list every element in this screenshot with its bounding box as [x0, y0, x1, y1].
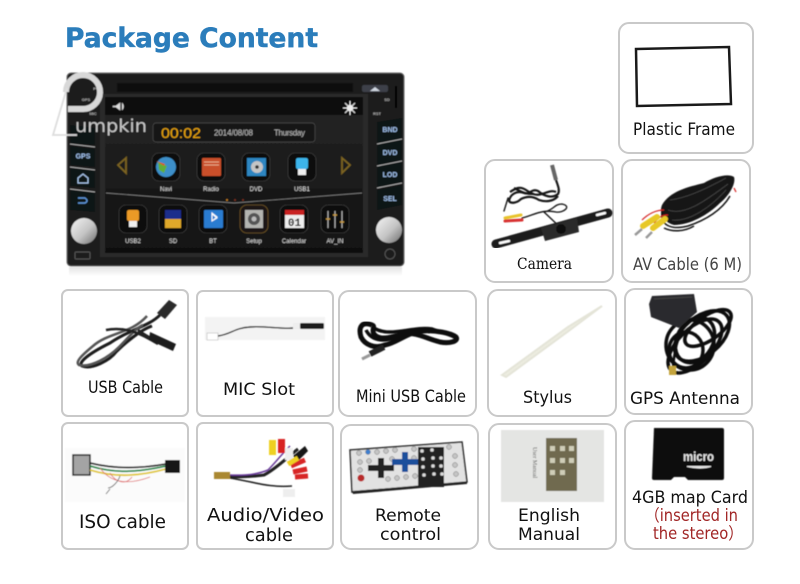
- car stereo head unit: [53, 73, 404, 276]
- frame image: [636, 47, 731, 106]
- manual image: User Manual: [531, 447, 537, 478]
- micro SD card image: micro: [683, 449, 714, 464]
- right side buttons: LOD: [383, 172, 397, 179]
- page dots: [226, 199, 244, 201]
- AV cable image: [635, 175, 736, 238]
- mini USB cable image: [360, 324, 457, 359]
- audio video cable image: [214, 439, 308, 497]
- right side buttons: BND: [382, 127, 398, 134]
- tune knob: [376, 217, 402, 243]
- app icons row one: DVD: [250, 187, 263, 193]
- left side buttons: [70, 125, 95, 212]
- panel: ISO cable: [62, 423, 188, 549]
- right side buttons: SEL: [383, 196, 398, 203]
- label: Stylus: [523, 388, 572, 407]
- panel: MIC slot: [197, 291, 333, 416]
- app icons row one: Navi: [160, 187, 172, 193]
- label: ISO cable: [79, 511, 166, 533]
- label: Plastic Frame: [633, 120, 735, 139]
- label: MIC Slot: [223, 380, 296, 399]
- label: AV Cable (6 M): [633, 255, 742, 274]
- app icons row two: AV_IN: [327, 239, 343, 245]
- USB cable image: [78, 300, 177, 367]
- panel: map card: [625, 421, 753, 549]
- panel: plastic frame: [619, 23, 753, 153]
- label line two: Manual: [518, 525, 580, 544]
- time and date bar: 00:02: [161, 125, 201, 142]
- panel: USB cable: [62, 290, 188, 416]
- label: GPS Antenna: [630, 389, 740, 408]
- car stereo head unit: SD: [384, 97, 390, 102]
- GPS antenna image: [649, 294, 739, 382]
- stylus image: [502, 306, 602, 377]
- app icons row one: Radio: [203, 187, 219, 193]
- app icons row two: BT: [209, 239, 217, 245]
- panel: mini USB cable: [339, 291, 476, 416]
- camera image: [496, 165, 608, 244]
- label: Remote: [375, 506, 441, 525]
- right side buttons: [377, 118, 402, 210]
- car stereo head unit: POW: [93, 86, 103, 91]
- panel: audio video cable: [197, 423, 333, 549]
- car stereo head unit: MIC: [89, 111, 97, 116]
- app icons row two: Calendar: [282, 239, 306, 245]
- logo watermark: [53, 75, 147, 137]
- app icons row one: USB1: [294, 187, 310, 193]
- left side buttons: GPS: [76, 154, 91, 160]
- label: Camera: [517, 254, 572, 273]
- label line two: control: [380, 525, 441, 544]
- time and date bar: [153, 123, 315, 142]
- car stereo head unit: GPS: [82, 97, 91, 102]
- time and date bar: Thursday: [274, 128, 305, 138]
- title: Package Content: [65, 23, 318, 54]
- app icons row two: SD: [169, 239, 178, 245]
- label: English: [518, 506, 580, 525]
- app icons row two: [119, 205, 349, 245]
- ISO cable image: [65, 448, 185, 502]
- logo watermark: umpkin: [75, 116, 147, 137]
- right side buttons: DVD: [383, 150, 397, 157]
- remote control image: [350, 442, 467, 494]
- panel: stylus: [488, 290, 616, 416]
- brightness icon: [343, 101, 357, 115]
- volume icon: [113, 103, 124, 110]
- volume knob: [71, 218, 97, 244]
- time and date bar: 2014/08/08: [214, 128, 254, 138]
- label: Mini USB Cable: [356, 387, 466, 406]
- panel: camera: [485, 160, 613, 282]
- app icons row two: USB2: [125, 239, 141, 245]
- red note line one: （inserted in: [645, 506, 738, 525]
- screen divider curve: [106, 193, 362, 203]
- app icons row two: Setup: [246, 239, 262, 245]
- panel: remote control: [341, 425, 478, 549]
- red note line two: the stereo）: [653, 524, 743, 543]
- label: Audio/Video: [207, 506, 324, 526]
- label line two: cable: [245, 526, 293, 546]
- MIC cable image: [205, 317, 325, 340]
- label: 4GB map Card: [632, 488, 748, 507]
- app icons row two: 01: [288, 218, 301, 230]
- panel: AV cable: [622, 160, 750, 282]
- app icons row one: [152, 153, 316, 193]
- panel: English manual: [489, 424, 616, 549]
- navigation arrows: [118, 158, 350, 173]
- car stereo head unit: RST: [373, 111, 382, 116]
- label: USB Cable: [88, 378, 163, 397]
- panel: GPS antenna: [625, 289, 752, 414]
- bottom port and button: [75, 249, 395, 259]
